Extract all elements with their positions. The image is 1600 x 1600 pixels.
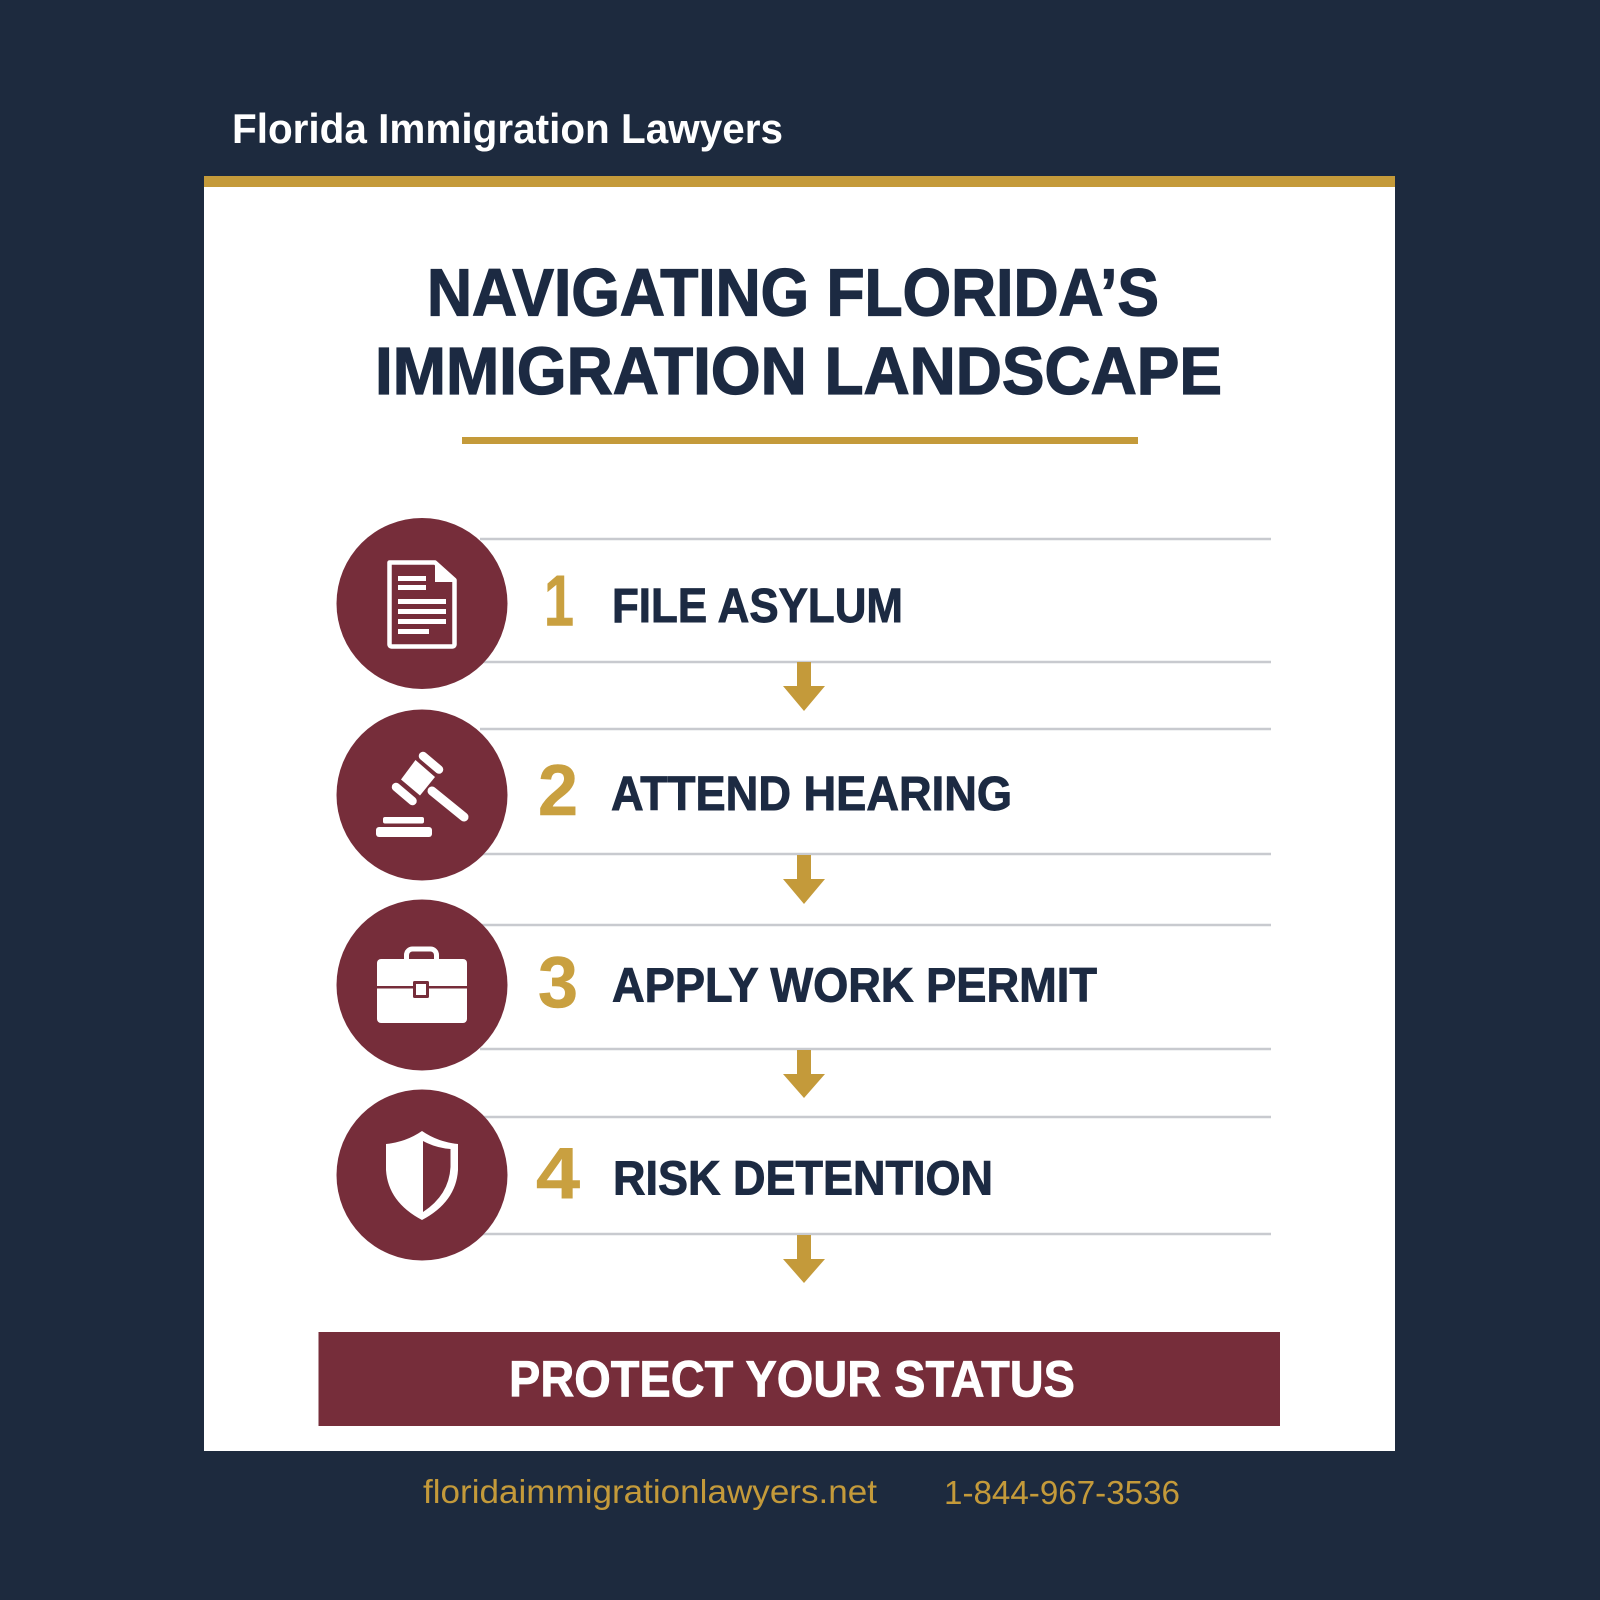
arrow 1 [783,662,825,711]
label: RISK DETENTION [613,1152,993,1206]
arrow 4 [783,1235,825,1283]
title: NAVIGATING FLORIDA’S [427,256,1159,330]
label: APPLY WORK PERMIT [612,960,1097,1012]
arrow 2 [783,855,825,904]
number 2: 2 [538,751,578,831]
step 1: file asylum [336,518,1271,689]
icon: gavel [336,710,508,880]
number 4: 4 [536,1134,580,1214]
arrow 3 [783,1050,825,1098]
title: IMMIGRATION LANDSCAPE [375,334,1222,409]
icon: shield [336,1090,508,1260]
icon: briefcase [336,900,508,1070]
callout banner: protect your status [318,1332,1280,1426]
number 1: 1 [544,562,574,642]
step 4: risk detention [336,1090,1271,1260]
label: ATTEND HEARING [611,768,1012,821]
icon: document [336,518,508,689]
label: FILE ASYLUM [612,580,903,633]
step 3: apply work permit [336,900,1271,1070]
panel: main white card [204,176,1395,1451]
brand name header: Florida Immigration Lawyers [232,105,783,152]
callout banner: protect your status: PROTECT YOUR STATUS [509,1350,1075,1408]
step 2: attend hearing [336,710,1271,880]
title [375,256,1222,409]
footer contact details: floridaimmigrationlawyers.net [423,1473,877,1510]
title underline [462,437,1138,444]
number 3: 3 [538,943,578,1023]
footer contact details [423,1473,1180,1511]
footer contact details: 1-844-967-3536 [944,1474,1180,1511]
